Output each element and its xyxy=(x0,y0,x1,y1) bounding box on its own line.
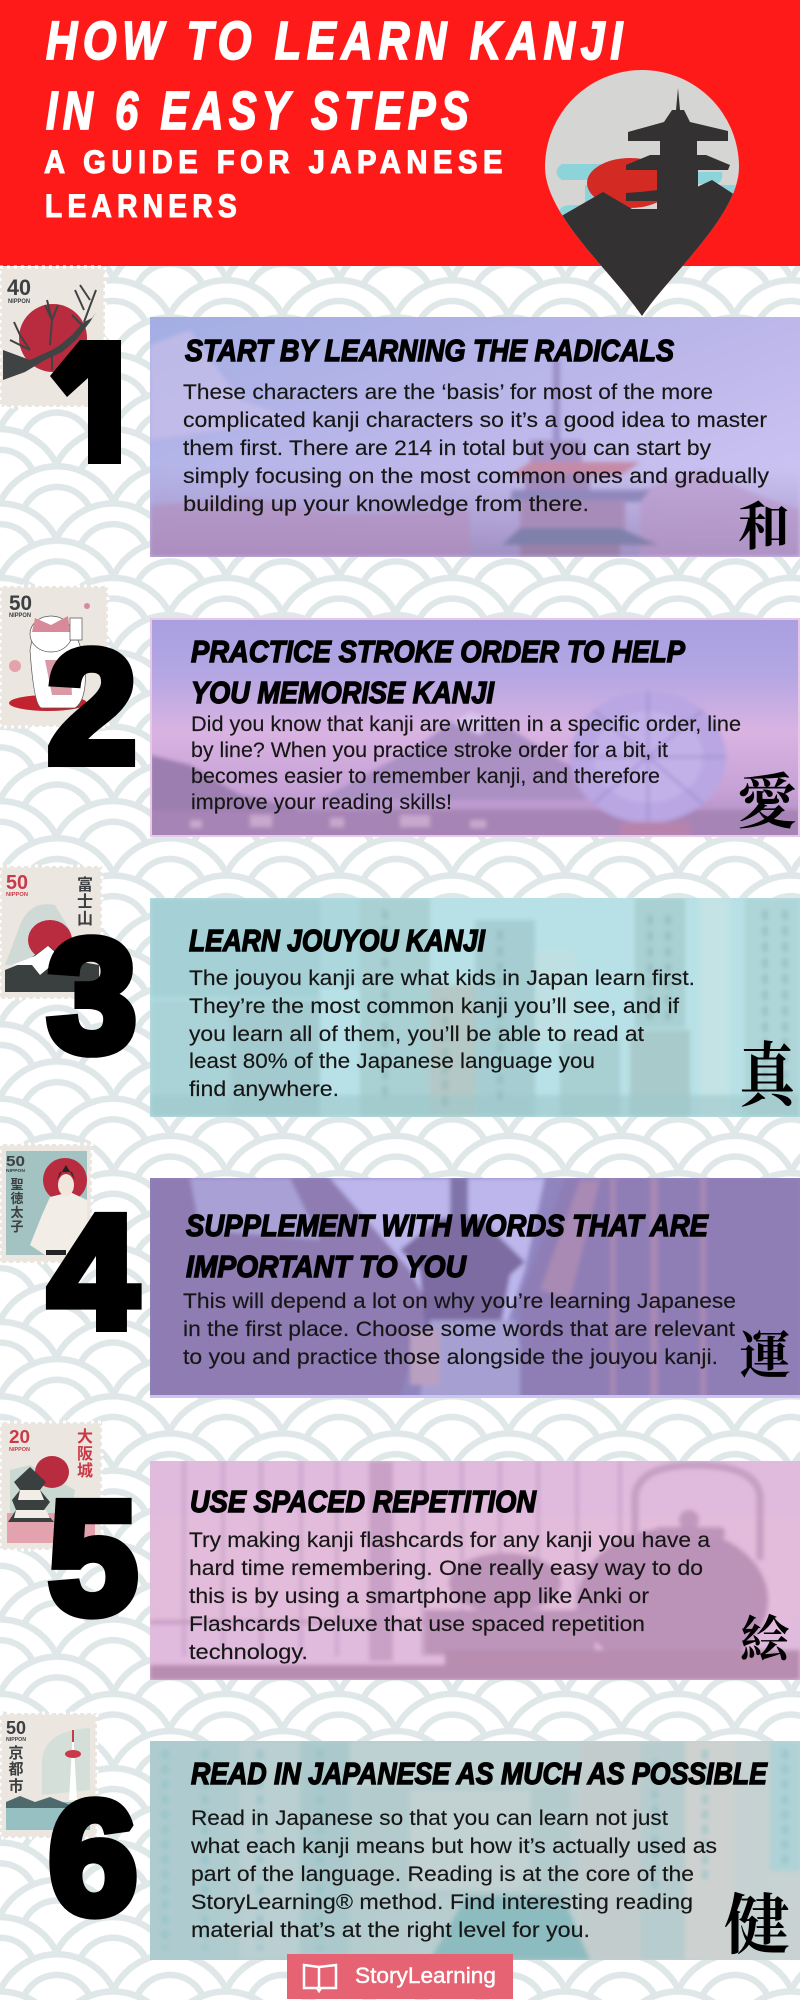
body text: by line? When you practice stroke order for a bit, it xyxy=(191,739,668,762)
body text: This will depend a lot on why you’re learning Japanese xyxy=(183,1290,736,1313)
stamp 4: Prince Shotoku: 徳 xyxy=(10,1191,24,1206)
heading: SUPPLEMENT WITH WORDS THAT ARE xyxy=(186,1208,709,1243)
stamp 4: Prince Shotoku xyxy=(0,1144,92,1263)
body text: find anywhere. xyxy=(189,1078,339,1101)
panel: step 5 xyxy=(150,1461,800,1680)
stamp 4: Prince Shotoku: 50 xyxy=(6,1153,25,1170)
stamp 3: Mount Fuji: 富 xyxy=(77,876,93,894)
step number 3: 3 xyxy=(48,906,136,1085)
body text: you learn all of them, you’ll be able to read at xyxy=(189,1023,644,1046)
heading: IMPORTANT TO YOU xyxy=(186,1249,467,1284)
step number 1: 1 xyxy=(51,306,149,502)
card background photo: street signs xyxy=(150,898,800,1117)
panel: step 4 xyxy=(150,1178,800,1398)
subtitle: LEARNERS xyxy=(45,188,242,224)
stamp 6: Kyoto tower: 50 xyxy=(6,1718,26,1738)
heading: LEARN JOUYOU KANJI xyxy=(189,923,486,958)
kanji: health: 健 xyxy=(724,1890,790,1963)
body text: They’re the most common kanji you’ll see, and if xyxy=(189,995,679,1018)
body text: These characters are the ‘basis’ for most of the more xyxy=(183,381,713,404)
stamp 1: pine tree and sun xyxy=(0,267,105,407)
heading: START BY LEARNING THE RADICALS xyxy=(185,333,674,368)
step number 4: 4 xyxy=(49,1182,138,1361)
step number 5: 5 xyxy=(49,1468,137,1647)
body text xyxy=(189,967,695,1101)
stamp 6: Kyoto tower: NIPPON xyxy=(6,1737,26,1743)
body text: least 80% of the Japanese language you xyxy=(189,1050,595,1073)
logo: StoryLearning xyxy=(287,1954,513,1999)
stamp 2: lucky cat xyxy=(0,586,108,727)
stamp 3: Mount Fuji: 山 xyxy=(77,910,93,928)
body text xyxy=(183,381,770,516)
body text: Try making kanji flashcards for any kanji you have a xyxy=(189,1529,710,1552)
icon: open book xyxy=(304,1965,336,1991)
title: IN 6 EASY STEPS xyxy=(46,81,474,141)
header banner xyxy=(0,0,800,266)
stamp 2: lucky cat: 50 xyxy=(9,592,32,615)
stamp 5: Osaka castle: 大 xyxy=(77,1428,93,1446)
stamp 5: Osaka castle: 城 xyxy=(77,1461,93,1480)
body text: in the first place. Choose some words that are relevant xyxy=(183,1318,735,1341)
body text xyxy=(183,1290,736,1369)
panel: step 1 xyxy=(150,317,800,557)
body text xyxy=(190,1807,717,1942)
body text xyxy=(191,713,741,814)
subtitle xyxy=(44,144,508,224)
body text: simply focusing on the most common ones and gradually xyxy=(183,465,770,488)
stamp 6: Kyoto tower: 京 xyxy=(8,1744,24,1762)
body text: improve your reading skills! xyxy=(191,791,452,814)
panel: step 3 xyxy=(150,898,800,1117)
stamp 6: Kyoto tower: 市 xyxy=(8,1777,24,1795)
heading: PRACTICE STROKE ORDER TO HELP xyxy=(191,634,685,669)
body text: becomes easier to remember kanji, and therefore xyxy=(191,765,660,788)
card background photo: Mount Fuji and umbrella xyxy=(150,618,800,837)
stamp 1: pine tree and sun: NIPPON xyxy=(8,299,30,305)
body text: to you and practice those alongside the jouyou kanji. xyxy=(183,1346,718,1369)
stamp 4: Prince Shotoku: 子 xyxy=(10,1219,24,1234)
stamp 3: Mount Fuji: NIPPON xyxy=(6,892,28,898)
card background photo: Kyoto street xyxy=(150,1178,800,1398)
body text: Flashcards Deluxe that use spaced repetition xyxy=(189,1613,645,1636)
stamp 5: Osaka castle: 阪 xyxy=(77,1445,93,1463)
card background photo: teapot and shoji window xyxy=(150,1461,800,1680)
panel: step 2 xyxy=(150,618,800,837)
title: HOW TO LEARN KANJI xyxy=(46,11,628,71)
title xyxy=(46,11,628,141)
kanji: truth: 真 xyxy=(739,1038,800,1116)
heading: YOU MEMORISE KANJI xyxy=(191,675,495,710)
body text: The jouyou kanji are what kids in Japan learn first. xyxy=(189,967,695,990)
heading xyxy=(191,634,685,710)
heading: USE SPACED REPETITION xyxy=(190,1484,537,1519)
stamp 6: Kyoto tower: 都 xyxy=(8,1761,24,1778)
stamp 3: Mount Fuji xyxy=(0,866,102,999)
step number 2: 2 xyxy=(48,617,136,796)
body text: StoryLearning® method. Find interesting reading xyxy=(191,1891,693,1914)
stamp 6: Kyoto tower xyxy=(0,1713,97,1838)
body text: building up your knowledge from there. xyxy=(183,493,589,516)
stamp 3: Mount Fuji: 50 xyxy=(6,872,28,894)
card background photo: pagoda xyxy=(150,317,800,557)
body text: Read in Japanese so that you can learn not just xyxy=(191,1807,668,1830)
body text: complicated kanji characters so it’s a good idea to master xyxy=(183,409,767,432)
stamp 1: pine tree and sun: 40 xyxy=(7,275,31,300)
subtitle: A GUIDE FOR JAPANESE xyxy=(44,144,508,180)
stamp 4: Prince Shotoku: NIPPON xyxy=(6,1168,25,1173)
body text: what each kanji means but how it’s actually used as xyxy=(190,1835,717,1858)
stamp 4: Prince Shotoku: 聖 xyxy=(10,1177,24,1192)
kanji: love: 愛 xyxy=(737,770,797,836)
body text xyxy=(189,1529,710,1664)
stamp 5: Osaka castle: 20 xyxy=(9,1427,30,1447)
card background photo: torii tunnel xyxy=(150,1741,800,1960)
body text: this is by using a smartphone app like Anki or xyxy=(189,1585,649,1608)
panel: step 6 xyxy=(150,1741,800,1963)
body text: them first. There are 214 in total but you can start by xyxy=(183,437,712,460)
body text: hard time remembering. One really easy way to do xyxy=(189,1557,703,1580)
body text: technology. xyxy=(189,1641,308,1664)
stamp 3: Mount Fuji: 士 xyxy=(77,893,93,911)
stamp 2: lucky cat: NIPPON xyxy=(9,613,31,619)
body text: part of the language. Reading is at the core of the xyxy=(191,1863,694,1886)
body text: material that’s at the right level for you. xyxy=(191,1919,590,1942)
stamp 5: Osaka castle xyxy=(0,1422,102,1550)
heading xyxy=(186,1208,709,1284)
step number 6: 6 xyxy=(49,1768,137,1947)
kanji: harmony: 和 xyxy=(738,500,790,557)
stamp 4: Prince Shotoku: 太 xyxy=(10,1205,24,1220)
body text: Did you know that kanji are written in a specific order, line xyxy=(191,713,741,736)
kanji: luck: 運 xyxy=(739,1329,791,1385)
icon: map pin with pagoda xyxy=(545,70,739,316)
stamp 5: Osaka castle: NIPPON xyxy=(9,1447,30,1453)
logo: StoryLearning: StoryLearning xyxy=(355,1963,496,1988)
kanji: picture: 絵 xyxy=(740,1612,792,1668)
